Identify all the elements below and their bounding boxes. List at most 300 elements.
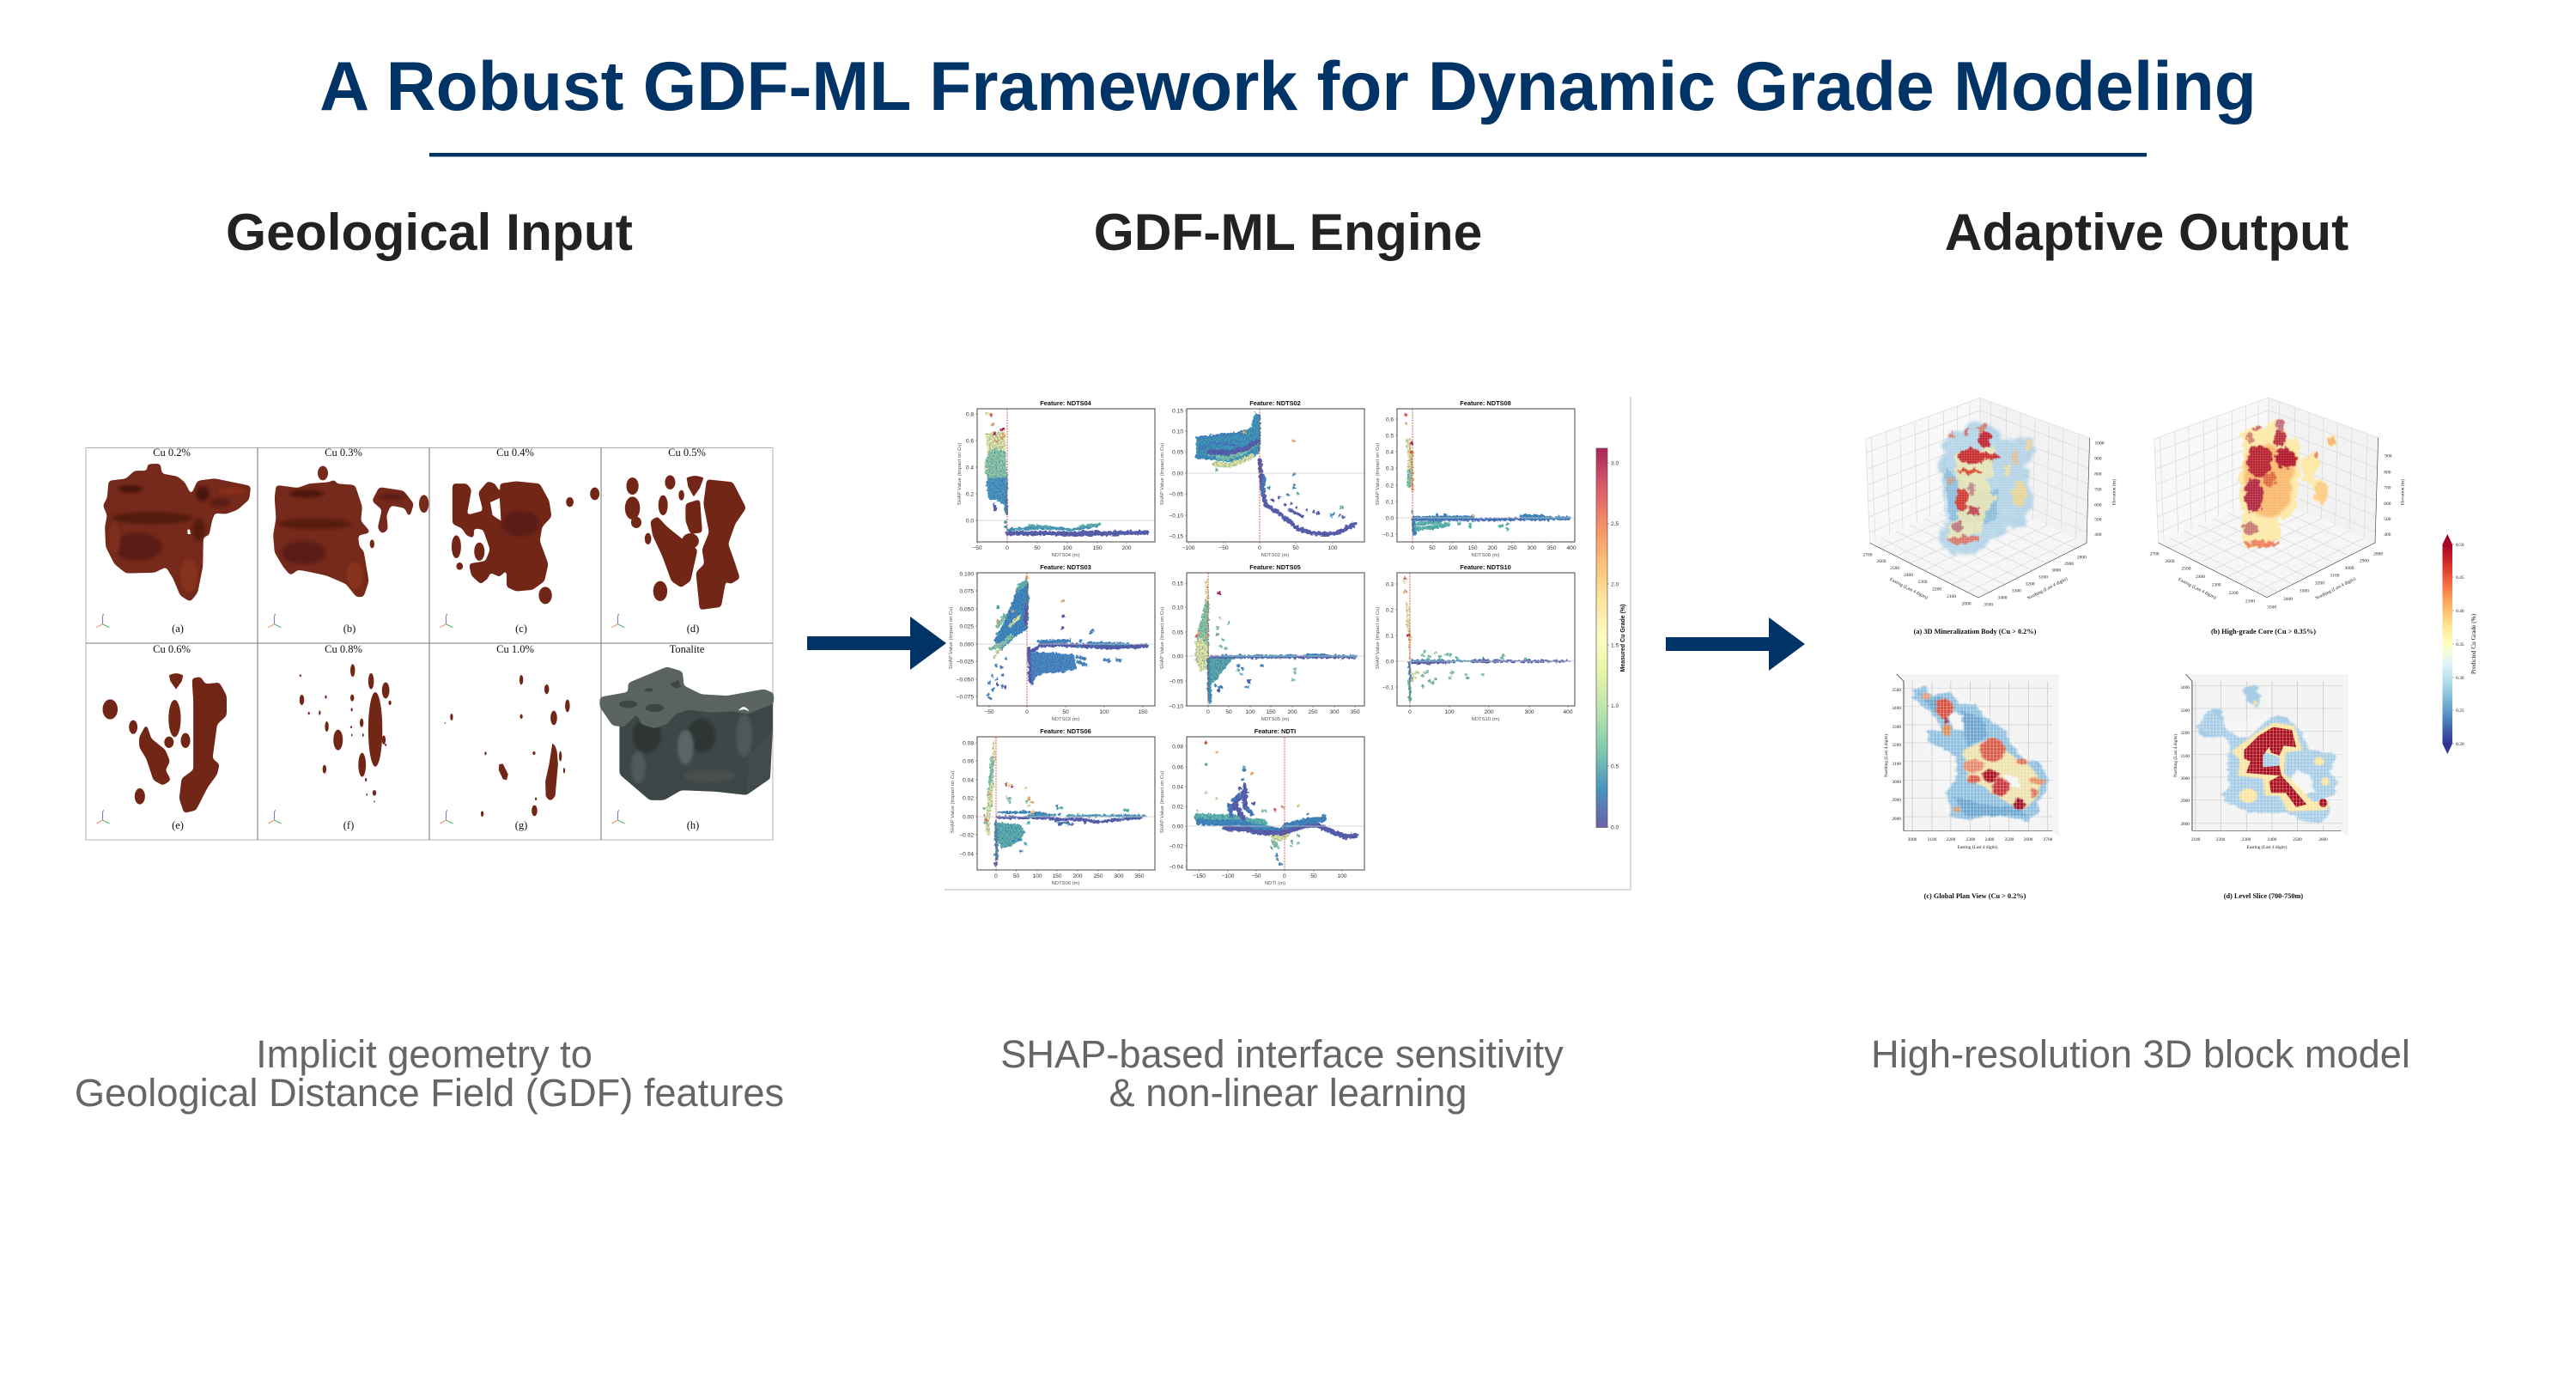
tick labels: 0.05	[1172, 450, 1183, 455]
plan view labels	[1883, 688, 2053, 850]
interface line	[1409, 573, 1411, 706]
tick labels and axis titles: 2800	[2077, 556, 2087, 561]
labels: isosurface grades: Cu 0.3%	[325, 447, 362, 459]
tick labels and axis titles: 3500	[2267, 605, 2276, 610]
plan view labels: 3000	[1892, 780, 1901, 785]
plan view labels: 2400	[1985, 837, 1995, 842]
scatter points	[1405, 578, 1569, 700]
tick labels: −0.05	[1169, 678, 1183, 685]
blobs: Cu 0.4% to Cu 1.0%	[102, 475, 746, 817]
tick labels and axis titles: 600	[2094, 502, 2102, 508]
caption c: (c) Global Plan View (Cu > 0.2%)	[1924, 892, 2026, 900]
chart: high-grade core	[2150, 398, 2405, 610]
axis labels	[1160, 443, 1290, 558]
tick labels: 50	[1310, 873, 1317, 879]
labels: isosurface grades: (f)	[343, 819, 354, 831]
frame and ticks	[975, 737, 1155, 872]
description: adaptive output: High-resolution 3D block model	[1871, 1032, 2410, 1076]
labels: isosurface grades: Cu 0.8%	[325, 643, 362, 655]
tick labels and axis titles: 2800	[2373, 551, 2383, 556]
axes box	[2154, 398, 2379, 598]
blob d	[625, 475, 746, 610]
tick labels and axis titles: 3300	[2300, 589, 2309, 594]
lattice texture	[1909, 684, 2053, 824]
blob b	[273, 479, 371, 597]
caption a: (a) 3D Mineralization Body (Cu > 0.2%)	[1914, 628, 2037, 635]
tick labels and axis titles: 3200	[2315, 581, 2324, 587]
tick labels: 0	[1025, 709, 1029, 715]
colorbar: measured Cu grade	[1596, 448, 1626, 831]
tick labels: −0.05	[1169, 491, 1183, 498]
labels: isosurface grades: Cu 0.4%	[496, 447, 534, 459]
tick labels and axis titles: 600	[2384, 502, 2391, 507]
scatter points	[984, 414, 1147, 534]
plot: NDTS03	[949, 563, 1155, 722]
zero line	[1187, 472, 1364, 474]
colorbar: measured Cu grade: 1.0	[1611, 703, 1619, 709]
tick labels: 100	[1032, 873, 1042, 879]
tick labels: 0.6	[966, 438, 974, 445]
tick labels and axis titles: 700	[2094, 487, 2102, 492]
tick labels and axis titles: 400	[2094, 532, 2102, 538]
plot: NDTI	[1160, 727, 1364, 886]
tick labels: 0.2	[966, 491, 974, 498]
tick labels: −100	[1182, 545, 1195, 551]
axis labels: SHAP Value (Impact on Cu)	[951, 771, 956, 833]
tick labels and axis titles: 3400	[2283, 597, 2293, 602]
tick labels: 300	[1524, 709, 1534, 715]
tick labels: 150	[1092, 545, 1103, 551]
tick labels: 0.04	[1172, 785, 1183, 790]
heading: Geological Input: Geological Input	[226, 203, 633, 261]
tick labels and axis titles: 800	[2094, 472, 2102, 477]
labels: isosurface grades: (e)	[172, 819, 184, 831]
scatter points	[1406, 415, 1569, 534]
plot title: Feature: NDTS08	[1460, 399, 1511, 407]
tick labels and axis titles: 2900	[2360, 559, 2369, 564]
plan view labels: 2500	[2005, 837, 2014, 842]
panel: SHAP dependence plots	[945, 397, 1631, 890]
interface line	[1259, 409, 1261, 542]
plot: NDTS02	[1160, 399, 1364, 558]
tick labels: 0.050	[959, 606, 974, 613]
arrow: engine to output	[1666, 617, 1805, 671]
scatter points	[1195, 581, 1357, 702]
plan view labels: Easting (Last 4 digits)	[1958, 844, 1998, 850]
outer low-grade shell	[1941, 423, 2037, 556]
tick labels: 0.3	[1386, 582, 1394, 587]
axis labels: NDTS04 (m)	[1051, 553, 1080, 558]
tick labels and axis titles: 2900	[2064, 562, 2074, 567]
slice labels: 3000	[2180, 776, 2190, 781]
tick labels: 150	[1138, 709, 1148, 715]
low-grade body	[1913, 685, 2049, 822]
tick labels and axis titles: 2400	[2196, 575, 2205, 580]
labels: isosurface grades: Tonalite	[670, 643, 705, 655]
plan walls and grid	[1897, 674, 2059, 836]
plot: NDTS06	[951, 727, 1155, 886]
tick labels and axis titles: Northing (Last 4 digits)	[2314, 575, 2357, 601]
tick labels: 0.100	[959, 572, 974, 577]
plot title: Feature: NDTS06	[1040, 727, 1091, 735]
tick labels and axis titles: 3200	[2026, 581, 2035, 587]
plot title: Feature: NDTS03	[1040, 563, 1091, 571]
title: A Robust GDF-ML Framework for Dynamic Grade Modeling	[319, 48, 2257, 125]
tick labels and axis titles: 3500	[1984, 602, 1993, 607]
tick labels: 400	[1563, 709, 1573, 715]
frame and ticks	[1395, 409, 1575, 544]
tick labels: 200	[1487, 545, 1498, 551]
labels: isosurface grades: (d)	[687, 623, 699, 635]
plot: NDTS04	[957, 399, 1155, 558]
tick labels: 0.10	[1172, 429, 1183, 435]
tick labels and axis titles: 2300	[1918, 580, 1928, 585]
tonalite window	[738, 707, 750, 711]
tick labels: 250	[1093, 873, 1103, 879]
zero line	[1397, 660, 1575, 662]
tick labels: 200	[1287, 709, 1297, 715]
slice labels: 2600	[2318, 837, 2328, 842]
tick labels: 300	[1527, 545, 1537, 551]
labels: isosurface grades: (c)	[515, 623, 527, 635]
heading: Adaptive Output: Adaptive Output	[1945, 203, 2348, 261]
tick labels: 0	[1005, 545, 1009, 551]
frame and ticks	[1395, 573, 1575, 708]
tick labels and axis titles: 2500	[2182, 567, 2191, 572]
plan view labels: Northing (Last 4 digits)	[1883, 734, 1889, 777]
tick labels: 0.8	[966, 412, 974, 417]
tick labels and axis titles: 1000	[2095, 441, 2105, 447]
colorbar: predicted Cu grade: 0.50	[2456, 543, 2464, 548]
zero line	[977, 643, 1155, 645]
colorbar: measured Cu grade: 0.5	[1611, 764, 1619, 769]
zero line	[977, 520, 1155, 521]
interface line	[1026, 573, 1028, 706]
axis labels	[949, 607, 1080, 722]
labels: isosurface grades: (b)	[343, 623, 355, 635]
tick labels: 0.075	[959, 589, 974, 594]
axis labels: NDTS03 (m)	[1051, 717, 1080, 722]
tick labels: 50	[1062, 709, 1069, 715]
high-grade zones	[2243, 418, 2335, 548]
tick labels: 0.02	[1172, 804, 1183, 811]
plan view labels: 2000	[1908, 837, 1917, 842]
labels: isosurface grades: (h)	[687, 819, 699, 831]
tick labels: 0.06	[1172, 764, 1183, 771]
slice walls and grid	[2186, 674, 2348, 836]
outer shell	[2239, 418, 2336, 550]
tick labels: 200	[1072, 873, 1083, 879]
colorbar: measured Cu grade: 2.5	[1611, 521, 1619, 527]
tick labels and axis titles: 3100	[2330, 574, 2340, 579]
tick labels and axis titles: 2000	[1962, 602, 1971, 607]
panel: geological input isosurfaces	[86, 447, 774, 840]
plan view labels: 2200	[1947, 837, 1956, 842]
axis labels: SHAP Value (Impact on Cu)	[1160, 607, 1165, 669]
tick labels: 150	[1266, 709, 1276, 715]
tick labels: 150	[1052, 873, 1062, 879]
labels: isosurface grades: Cu 0.6%	[153, 643, 191, 655]
tick labels	[1382, 582, 1573, 715]
slice labels: 2400	[2268, 837, 2277, 842]
slice labels: 2900	[2180, 799, 2190, 804]
plot title: Feature: NDTS04	[1040, 399, 1092, 407]
tick labels: 100	[1444, 709, 1455, 715]
tick labels: 100	[1099, 709, 1109, 715]
axis labels	[1160, 771, 1285, 886]
tick labels: 300	[1329, 709, 1340, 715]
slice labels: 2100	[2191, 837, 2201, 842]
blob f	[300, 664, 392, 802]
description: geological input: Geological Distance Field (GDF) features	[75, 1071, 784, 1115]
colorbar: measured Cu grade: Measured Cu Grade (%)	[1620, 605, 1626, 672]
tick labels: 0.2	[1386, 483, 1394, 489]
tick labels: 0.15	[1172, 409, 1183, 414]
tick labels: 100	[1062, 545, 1072, 551]
tick labels: 200	[1121, 545, 1132, 551]
description: GDF-ML engine: SHAP-based interface sensitivity	[1000, 1032, 1564, 1076]
colorbar: predicted Cu grade	[2442, 534, 2477, 754]
high-grade zones	[1922, 692, 2045, 812]
high-grade core	[2245, 727, 2327, 807]
tick labels: −150	[1193, 873, 1206, 879]
labels: isosurface grades: Cu 0.2%	[153, 447, 191, 459]
tick labels and axis titles: 2100	[2245, 599, 2255, 605]
scatter points	[984, 742, 1145, 864]
slice labels: 3300	[2180, 708, 2190, 714]
high-grade zones	[1947, 424, 2000, 544]
tick labels: 0.00	[963, 814, 974, 821]
tick labels	[966, 412, 1132, 551]
tonalite holes	[619, 680, 681, 712]
zero line	[1187, 825, 1364, 827]
tick labels: −0.050	[957, 677, 974, 684]
tick labels: −0.1	[1382, 532, 1394, 538]
interface line	[1284, 737, 1285, 870]
blob b shading	[279, 490, 405, 590]
plan view labels: 3500	[1892, 688, 1901, 693]
blob h: tonalite body	[600, 667, 774, 800]
tick labels: 0	[1408, 709, 1412, 715]
plan view labels: 2100	[1928, 837, 1937, 842]
tick labels and axis titles: 800	[2384, 470, 2391, 475]
grade zones	[1945, 439, 2032, 538]
tick labels: 0	[994, 873, 998, 879]
tick labels: −0.1	[1382, 685, 1394, 690]
tick labels: 0.08	[963, 740, 974, 747]
tick labels: 100	[1448, 545, 1458, 551]
slice labels: 2300	[2242, 837, 2251, 842]
labels: isosurface grades: Cu 1.0%	[496, 643, 534, 655]
blob g	[445, 675, 570, 817]
tick labels: 0.4	[966, 465, 974, 471]
tick labels: 0.00	[1172, 471, 1183, 477]
tick labels	[1169, 409, 1338, 551]
tick labels and axis titles: 400	[2384, 532, 2391, 538]
tick labels	[957, 572, 1148, 715]
mid-grade zone	[1963, 737, 2040, 810]
tick labels: 0	[1206, 709, 1210, 715]
tick labels: 0	[1283, 873, 1286, 879]
axis labels: SHAP Value (Impact on Cu)	[1376, 443, 1381, 505]
tonalite top face	[600, 667, 774, 728]
tick labels and axis titles: 2600	[1877, 559, 1886, 564]
arrow: input to engine	[807, 617, 946, 670]
tick labels and axis titles: Easting (Last 4 digits)	[1889, 576, 1929, 601]
interface line	[1412, 409, 1413, 542]
labels: isosurface grades: (g)	[515, 819, 527, 831]
interior low-grade window	[2263, 751, 2280, 767]
blob e	[102, 673, 227, 813]
slice labels: Northing (Last 4 digits)	[2172, 734, 2178, 777]
lattice texture	[2196, 707, 2340, 826]
tick labels: −50	[984, 709, 994, 715]
axis labels: NDTS08 (m)	[1471, 553, 1500, 558]
axis labels: NDTS06 (m)	[1051, 881, 1080, 886]
scatter points	[987, 578, 1146, 698]
axis labels: NDTS05 (m)	[1261, 717, 1290, 722]
image edge lines	[945, 397, 1631, 890]
tick labels: −0.10	[1169, 704, 1183, 709]
tick labels: 0.1	[1386, 500, 1394, 505]
tick labels and axis titles	[2150, 454, 2405, 610]
blob c	[452, 482, 599, 604]
scatter points	[1197, 743, 1356, 864]
chart: level slice	[2186, 674, 2348, 836]
tick labels: −0.02	[1169, 843, 1183, 850]
tick labels and axis titles: 2400	[1904, 573, 1913, 578]
interface line	[995, 737, 997, 870]
tick labels: −0.04	[1169, 864, 1183, 871]
zero line	[1187, 655, 1364, 657]
tick labels: 100	[1337, 873, 1347, 879]
colorbar: measured Cu grade: 3.0	[1611, 460, 1619, 467]
chart: global plan view	[1897, 674, 2059, 836]
axis labels: NDTS10 (m)	[1471, 717, 1500, 722]
axis labels	[1376, 443, 1500, 558]
axis labels: SHAP Value (Impact on Cu)	[949, 607, 954, 669]
voids upper layer	[2002, 775, 2021, 788]
tick labels and axis titles: 900	[2385, 454, 2392, 459]
tick labels and axis titles: 2600	[2166, 559, 2175, 564]
mid-grade halo	[2232, 700, 2330, 812]
tick labels: −100	[1222, 873, 1235, 879]
colorbar: measured Cu grade: 2.0	[1611, 582, 1619, 587]
axis labels: SHAP Value (Impact on Cu)	[1160, 771, 1165, 833]
frame and ticks	[1185, 573, 1364, 708]
tick labels: 50	[1429, 545, 1436, 551]
axis labels	[1160, 607, 1290, 722]
frame and ticks	[1185, 409, 1364, 544]
tick labels and axis titles: 3400	[1998, 595, 2008, 600]
tick labels and axis titles: 2200	[1932, 587, 1941, 593]
slice labels: 3100	[2180, 754, 2190, 759]
slice labels: 3400	[2180, 685, 2190, 690]
plan view labels: 3200	[1892, 743, 1901, 748]
tick labels and axis titles: 3300	[2012, 588, 2021, 593]
description: GDF-ML engine: & non-linear learning	[1109, 1071, 1467, 1115]
tick labels: 0	[1258, 545, 1261, 551]
tick labels: 0.02	[963, 795, 974, 802]
tick labels: −50	[1218, 545, 1229, 551]
labels: isosurface grades	[153, 447, 706, 831]
tick labels: 0.3	[1386, 465, 1394, 472]
description: geological input: Implicit geometry to	[256, 1032, 592, 1076]
tick labels: 0.5	[1386, 433, 1394, 440]
tick labels and axis titles: Northing (Last 4 digits)	[2026, 575, 2069, 601]
tick labels: 0.0	[1386, 660, 1394, 665]
colorbar: predicted Cu grade: 0.45	[2456, 575, 2464, 581]
slice labels: 2200	[2216, 837, 2226, 842]
tick labels and axis titles: 2200	[2229, 591, 2239, 596]
axis labels: NDTS02 (m)	[1261, 553, 1290, 558]
tick labels	[1169, 581, 1360, 715]
tick labels and axis titles: 2300	[2212, 582, 2221, 587]
heading: GDF-ML Engine: GDF-ML Engine	[1094, 203, 1482, 261]
tick labels: 250	[1308, 709, 1318, 715]
tick labels: 0.08	[1172, 744, 1183, 751]
tick labels: −0.04	[959, 852, 974, 857]
tick labels: 50	[1292, 545, 1299, 551]
colorbar: predicted Cu grade: 0.20	[2456, 742, 2464, 747]
panel: adaptive output block models	[1863, 398, 2477, 900]
tick labels and axis titles: 3100	[2038, 575, 2048, 581]
tick labels: 300	[1114, 873, 1124, 879]
tick labels: 0.10	[1172, 605, 1183, 611]
tick labels: 0.15	[1172, 581, 1183, 587]
tick labels and axis titles: 900	[2094, 457, 2102, 462]
title underline	[429, 153, 2147, 156]
tick labels: 100	[1327, 545, 1338, 551]
plot title: Feature: NDTI	[1255, 727, 1296, 735]
tick labels: 0.1	[1386, 634, 1394, 639]
tick labels and axis titles: 2100	[1947, 594, 1956, 599]
tick labels: −0.10	[1169, 514, 1183, 519]
tick labels: 0.4	[1386, 450, 1394, 455]
tick labels and axis titles: 2500	[1890, 566, 1899, 571]
plan view labels: 3400	[1892, 706, 1901, 711]
tick labels and axis titles: 700	[2384, 486, 2391, 491]
tick labels: 0.025	[959, 623, 974, 630]
blob a hole	[187, 530, 191, 534]
mid-grade zone	[2244, 444, 2295, 517]
axis triads	[96, 614, 625, 824]
tick labels and axis titles: 3000	[2051, 568, 2061, 574]
colorbar: measured Cu grade: 1.5	[1611, 642, 1619, 649]
tick labels: 0.2	[1386, 608, 1394, 613]
plot: NDTS08	[1376, 399, 1577, 558]
interface line	[1207, 573, 1209, 706]
tick labels and axis titles: Easting (Last 4 digits)	[2178, 576, 2217, 601]
scatter points	[1196, 412, 1355, 534]
colorbar: predicted Cu grade: 0.25	[2456, 708, 2464, 714]
void	[2287, 770, 2315, 794]
tick labels: −50	[1251, 873, 1261, 879]
axis labels: SHAP Value (Impact on Cu)	[957, 443, 963, 505]
plot: NDTS10	[1376, 563, 1575, 722]
plan view labels: 3300	[1892, 725, 1901, 730]
tick labels and axis titles: 500	[2094, 518, 2102, 523]
plan view labels: 3100	[1892, 762, 1901, 767]
tick labels: 250	[1507, 545, 1517, 551]
slice labels	[2172, 685, 2328, 850]
tick labels: 0.00	[1172, 824, 1183, 830]
frame and ticks	[1185, 737, 1364, 872]
colorbar: predicted Cu grade: 0.40	[2456, 609, 2464, 614]
caption d: (d) Level Slice (700-750m)	[2224, 892, 2303, 900]
tick labels: 350	[1546, 545, 1557, 551]
labels: isosurface grades: Cu 0.5%	[668, 447, 706, 459]
